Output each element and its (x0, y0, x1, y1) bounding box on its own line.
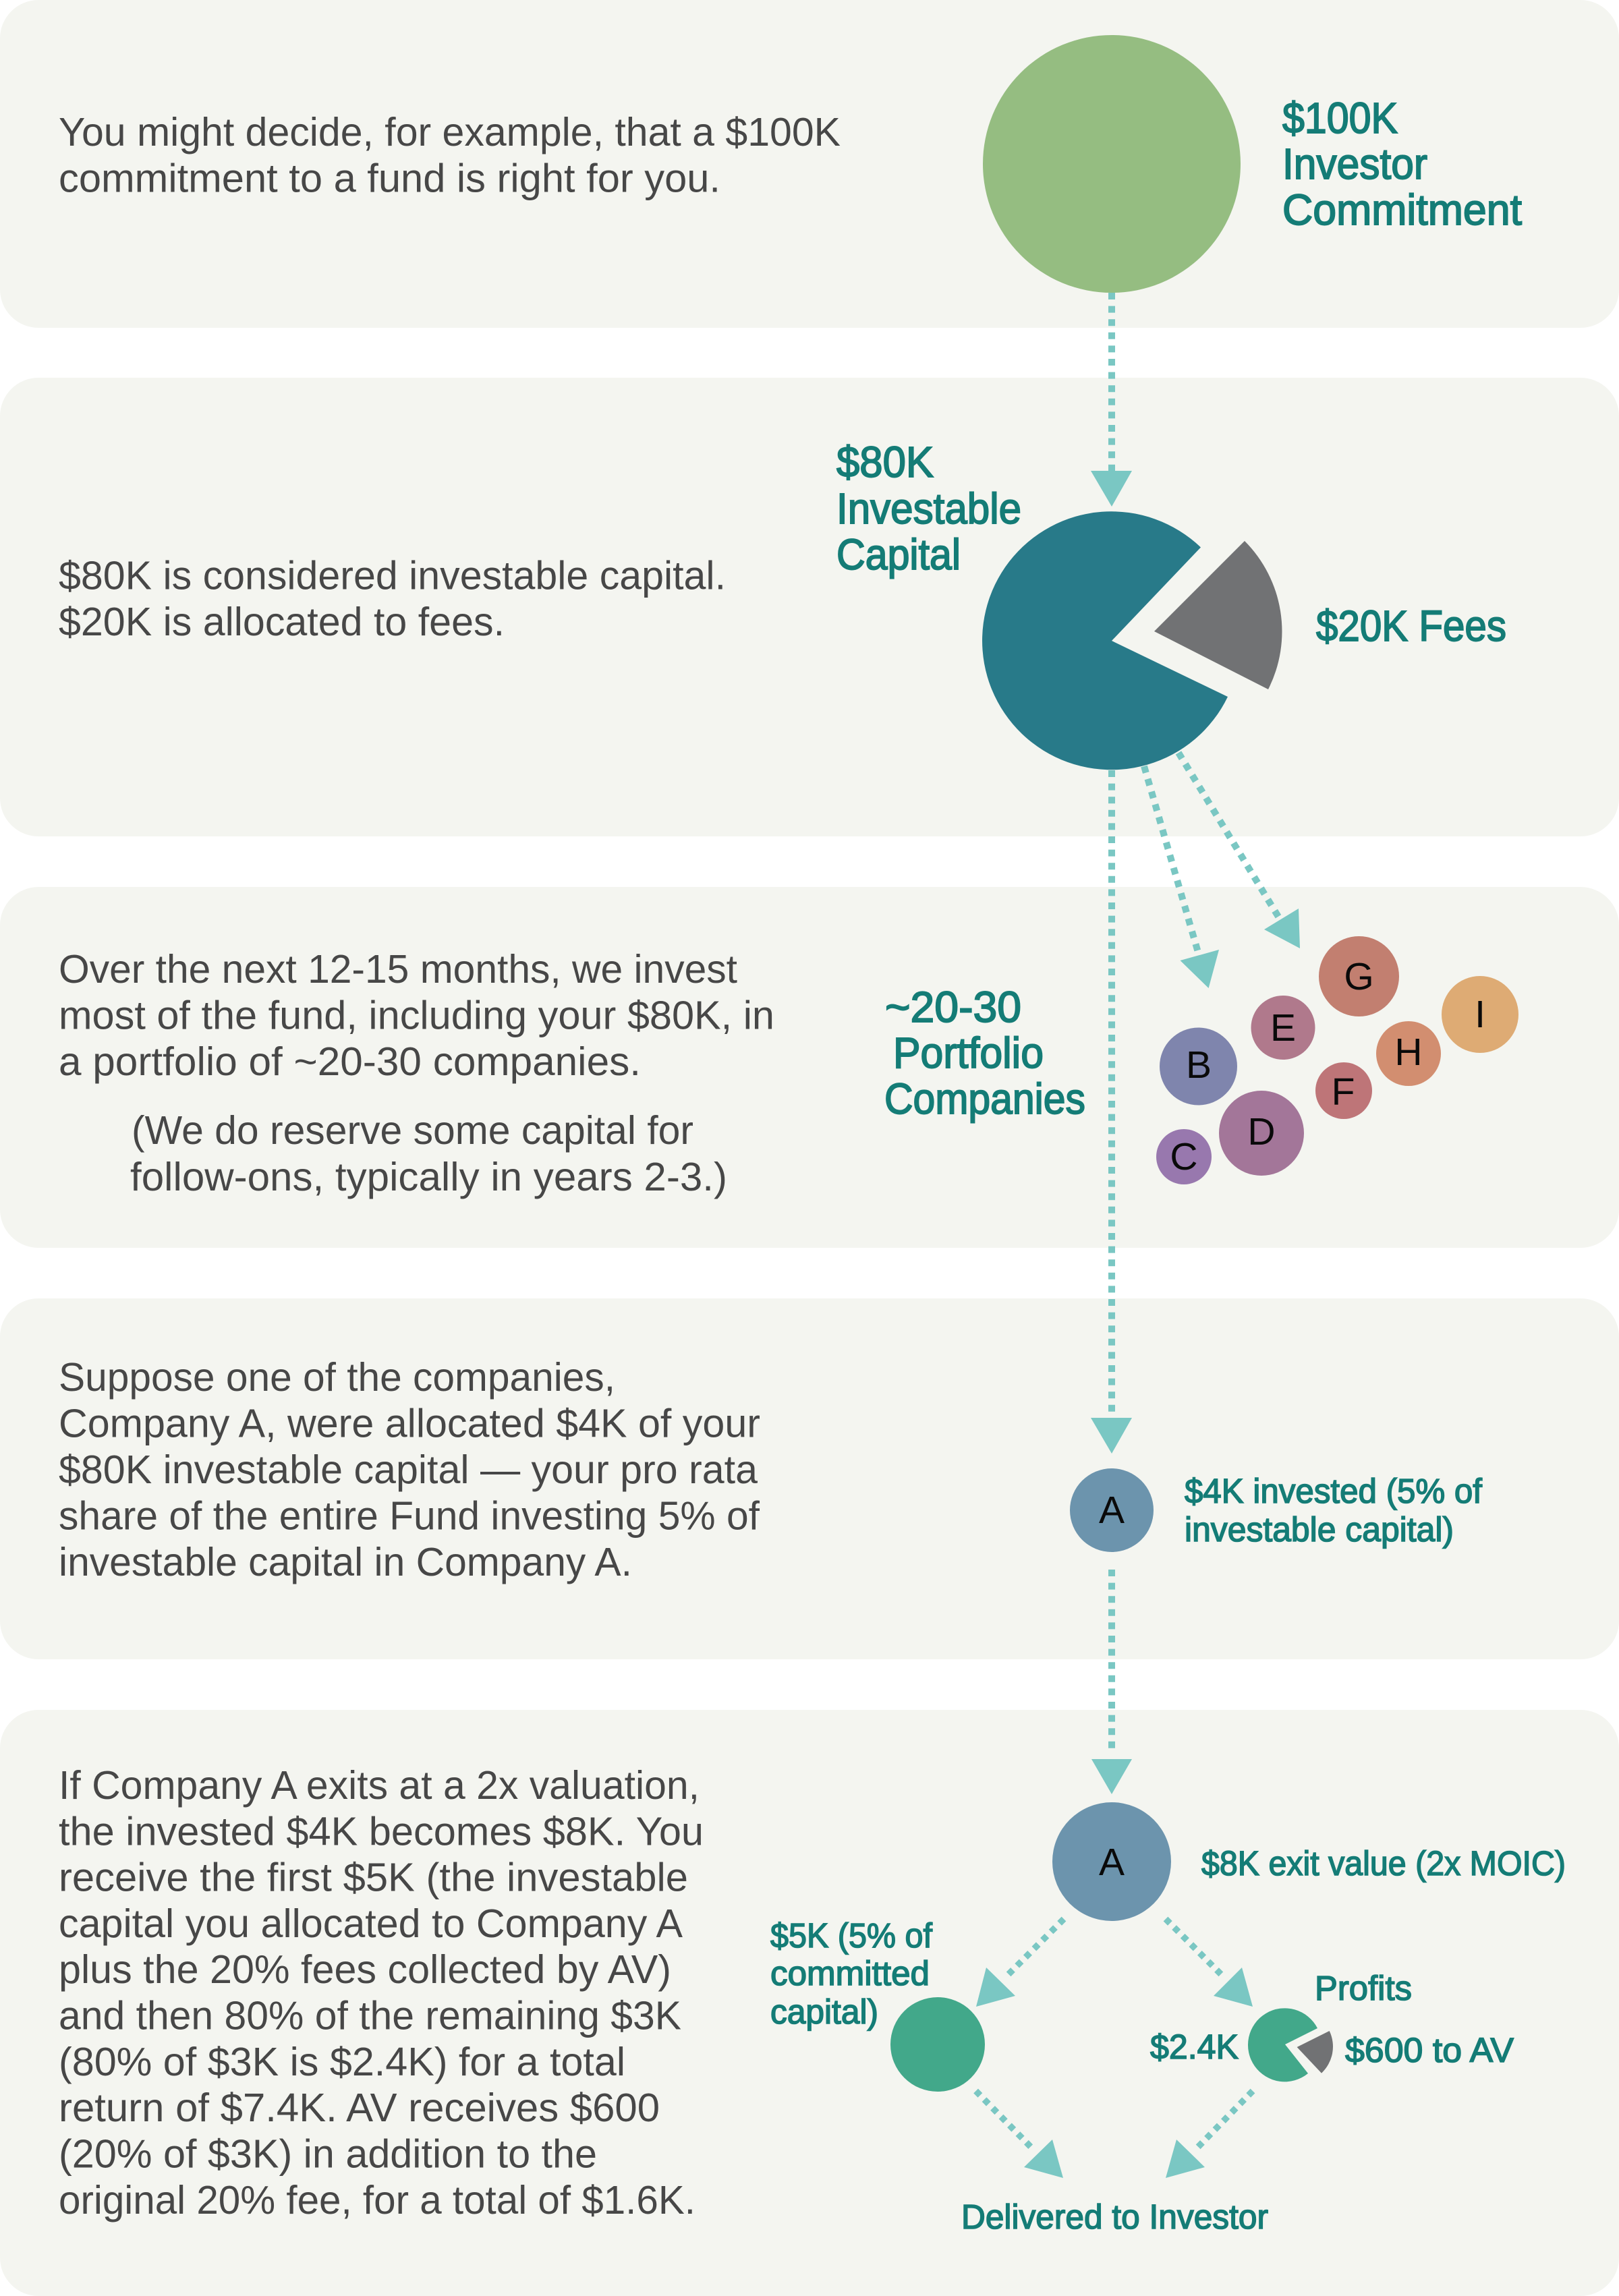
text: allocation description: Suppose one of the companies, (59, 1354, 615, 1400)
label: 20-30 portfolio companies: Portfolio (893, 1029, 1044, 1077)
label: delivered to investor: Delivered to Investor (961, 2198, 1268, 2236)
label: 20-30 portfolio companies: Companies (884, 1074, 1085, 1123)
label: $5K committed capital: capital) (770, 1992, 878, 2031)
icon: company A exit circle (1052, 1802, 1171, 1921)
text: capital description (59, 553, 726, 644)
portfolio company circles: E (1270, 1006, 1296, 1050)
label: $5K committed capital (770, 1916, 933, 2031)
chart: profits pie AV share (1297, 2031, 1333, 2073)
arrow: capital to portfolio left (1144, 766, 1219, 988)
arrow: company A to exit (1091, 1570, 1132, 1794)
text: portfolio description: Over the next 12-15 months, we invest (59, 946, 737, 992)
text: portfolio description: most of the fund, including your $80K, in (59, 993, 774, 1037)
panel: investor commitment (59, 35, 1522, 293)
text: exit description: and then 80% of the remaining $3K (59, 1992, 681, 2038)
label: 20-30 portfolio companies (884, 983, 1085, 1123)
label: $80K investable capital (836, 438, 1021, 579)
label: $100K investor commitment: Investor (1282, 140, 1427, 188)
text: exit description: original 20% fee, for a total of $1.6K. (59, 2177, 695, 2222)
chart: investable capital pie slice (982, 511, 1228, 770)
portfolio company circles: I (1475, 993, 1485, 1036)
panel: investable capital (59, 438, 1506, 770)
label: $80K investable capital: Investable (836, 484, 1021, 533)
text: portfolio description (59, 946, 774, 1084)
label: $5K committed capital: committed (770, 1954, 930, 1992)
portfolio company circles (1156, 936, 1518, 1184)
portfolio company circles: C (1170, 1135, 1198, 1178)
label: $5K committed capital: $5K (5% of (770, 1916, 933, 1955)
text: allocation description: $80K investable capital — your pro rata (59, 1447, 758, 1492)
arrow: commitment to investable capital (1091, 293, 1132, 507)
text: exit description: capital you allocated to Company A (59, 1901, 683, 1946)
label: $8K exit value: $8K exit value (2x MOIC) (1201, 1844, 1566, 1883)
text: exit description: receive the first $5K (the investable (59, 1855, 688, 1900)
label: $100K investor commitment: $100K (1282, 94, 1398, 142)
text: commitment description: commitment to a fund is right for you. (59, 155, 720, 201)
text: follow-on note: follow-ons, typically in years 2-3.) (130, 1154, 727, 1199)
label: profits: Profits (1315, 1969, 1412, 2007)
text: exit description (59, 1762, 704, 2222)
text: allocation description: share of the entire Fund investing 5% of (59, 1493, 760, 1538)
icon: returned capital circle (890, 1997, 985, 2092)
label: $4K invested (1185, 1472, 1483, 1549)
arrow: exit to returned capital (976, 1919, 1064, 2007)
text: allocation description: Company A, were allocated $4K of your (59, 1400, 760, 1446)
text: exit description: plus the 20% fees collected by AV) (59, 1947, 671, 1992)
arrow: exit to profits (1166, 1919, 1253, 2007)
panel: exit (59, 1762, 1566, 2236)
label: $20K fees: $20K Fees (1316, 602, 1506, 650)
text: exit description: return of $7.4K. AV receives $600 (59, 2085, 660, 2130)
arrow: capital to portfolio right (1178, 753, 1300, 948)
arrow: profits to investor (1166, 2091, 1253, 2178)
label: $80K investable capital: Capital (836, 530, 961, 579)
text: commitment description (59, 109, 841, 201)
portfolio company circles: B (1186, 1043, 1212, 1087)
text: exit description: If Company A exits at a 2x valuation, (59, 1762, 700, 1808)
panel: company A allocation (59, 1354, 1483, 1584)
text: portfolio description: a portfolio of ~20-30 companies. (59, 1039, 641, 1084)
label: $4K invested: $4K invested (5% of (1185, 1472, 1483, 1510)
text: exit description: (20% of $3K) in addition to the (59, 2131, 597, 2176)
label: 20-30 portfolio companies: ~20-30 (885, 983, 1021, 1031)
text: commitment description: You might decide, for example, that a $100K (59, 109, 841, 154)
text: follow-on note (130, 1108, 727, 1199)
panel: portfolio (59, 936, 1518, 1199)
label: $100K investor commitment (1282, 94, 1522, 234)
label: $600 to AV: $600 to AV (1345, 2031, 1514, 2069)
text: allocation description (59, 1354, 760, 1584)
text: follow-on note: (We do reserve some capital for (132, 1108, 693, 1153)
text: exit description: the invested $4K becomes $8K. You (59, 1808, 704, 1854)
portfolio company circles: G (1344, 955, 1374, 998)
arrow: returned capital to investor (976, 2091, 1063, 2178)
text: exit description: (80% of $3K is $2.4K) for a total (59, 2039, 625, 2084)
label: $80K investable capital: $80K (836, 438, 934, 486)
icon: company A exit circle: A (1099, 1841, 1125, 1884)
text: allocation description: investable capital in Company A. (59, 1539, 632, 1584)
text: capital description: $20K is allocated to fees. (59, 599, 505, 644)
icon: company A circle (1070, 1468, 1154, 1552)
portfolio company circles: D (1247, 1110, 1276, 1153)
label: $2.4K: $2.4K (1150, 2028, 1239, 2066)
icon: commitment circle (983, 35, 1241, 293)
arrow: capital to company A (1091, 770, 1132, 1454)
portfolio company circles: H (1394, 1031, 1423, 1074)
chart: profits pie investor share (1248, 2008, 1317, 2082)
icon: company A circle: A (1099, 1489, 1125, 1532)
label: $100K investor commitment: Commitment (1282, 185, 1522, 234)
text: capital description: $80K is considered investable capital. (59, 553, 726, 598)
portfolio company circles: F (1332, 1070, 1355, 1114)
chart: fees pie slice (1154, 541, 1282, 689)
label: $4K invested: investable capital) (1185, 1510, 1454, 1549)
